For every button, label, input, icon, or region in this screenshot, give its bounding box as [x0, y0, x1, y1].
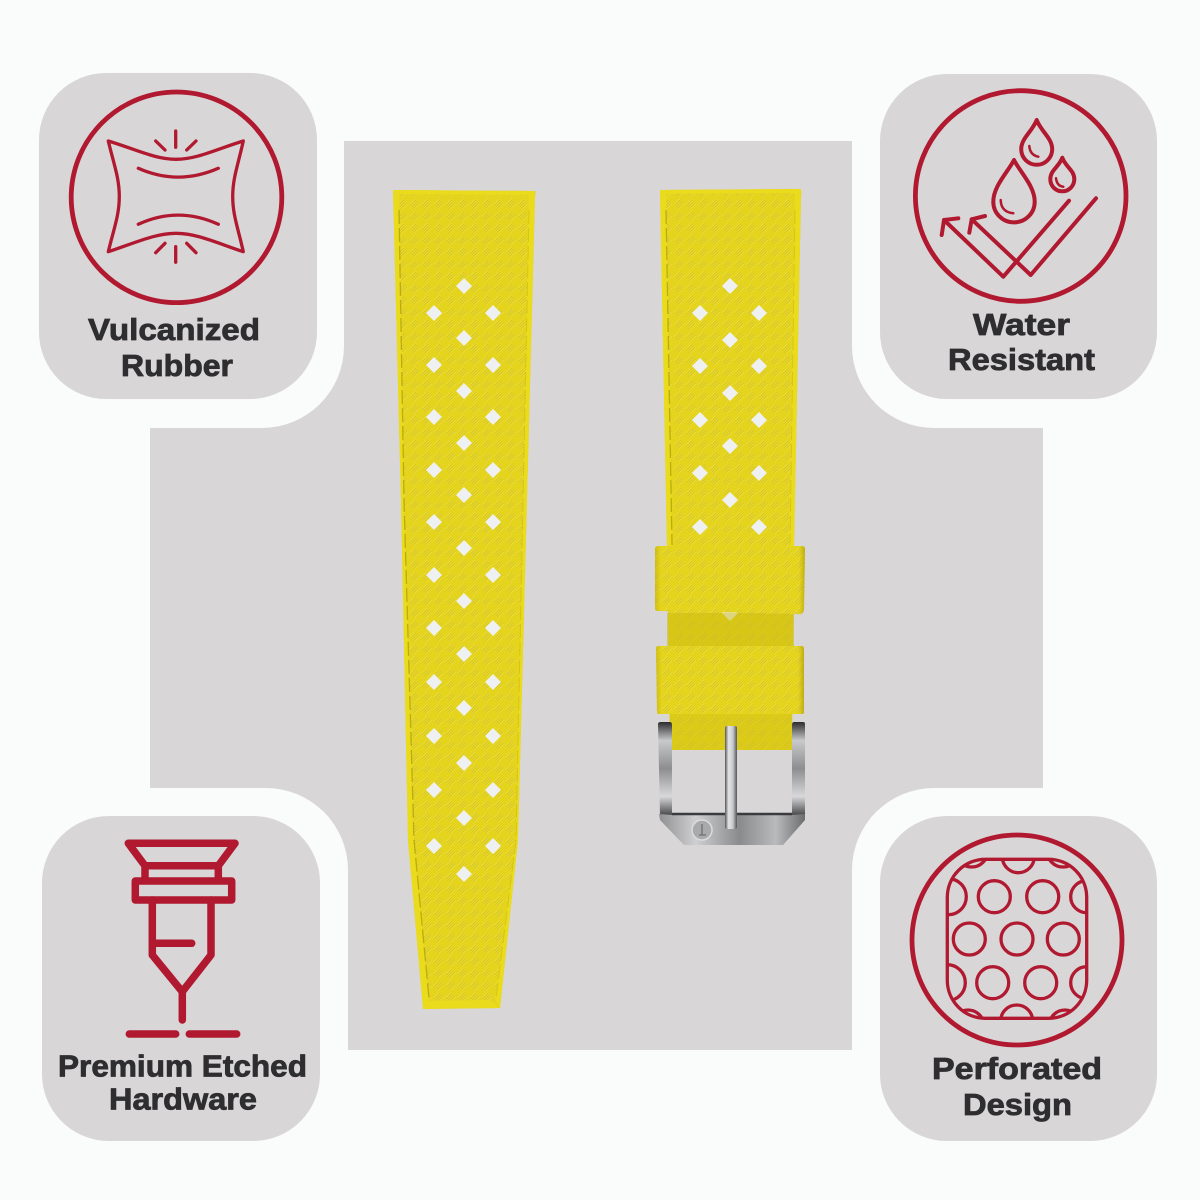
- label: premium etched hardware: Hardware: [109, 1082, 257, 1116]
- icon: stretching rubber: [71, 92, 282, 303]
- strap keeper: lower loop: [656, 646, 804, 714]
- panel: premium etched hardware: [42, 816, 320, 1141]
- strap keeper: upper loop: [655, 546, 805, 614]
- watch strap: long perforated piece: [393, 190, 536, 1009]
- panel: water resistant: [880, 74, 1157, 399]
- buckle: [658, 722, 805, 845]
- icon: perforated pattern: [912, 835, 1122, 1045]
- label: water resistant: Water: [973, 307, 1070, 342]
- label: perforated design: Design: [963, 1087, 1072, 1122]
- panel: vulcanized rubber: [39, 73, 317, 399]
- buckle logo: [692, 820, 712, 840]
- icon: water drops and arrows: [915, 91, 1126, 301]
- icon: laser etching head: [128, 843, 237, 1034]
- label: premium etched hardware: Premium Etched: [58, 1048, 307, 1084]
- panel: perforated design: [880, 816, 1157, 1141]
- label: perforated design: Perforated: [932, 1051, 1102, 1086]
- watch strap: short buckle piece: [660, 189, 801, 750]
- label: water resistant: Resistant: [948, 342, 1095, 377]
- label: vulcanized rubber: Rubber: [121, 348, 233, 383]
- perforation holes: short piece: [692, 278, 767, 621]
- buckle tongue: [725, 726, 737, 829]
- perforation holes: long piece: [426, 278, 501, 882]
- label: vulcanized rubber: Vulcanized: [88, 312, 260, 347]
